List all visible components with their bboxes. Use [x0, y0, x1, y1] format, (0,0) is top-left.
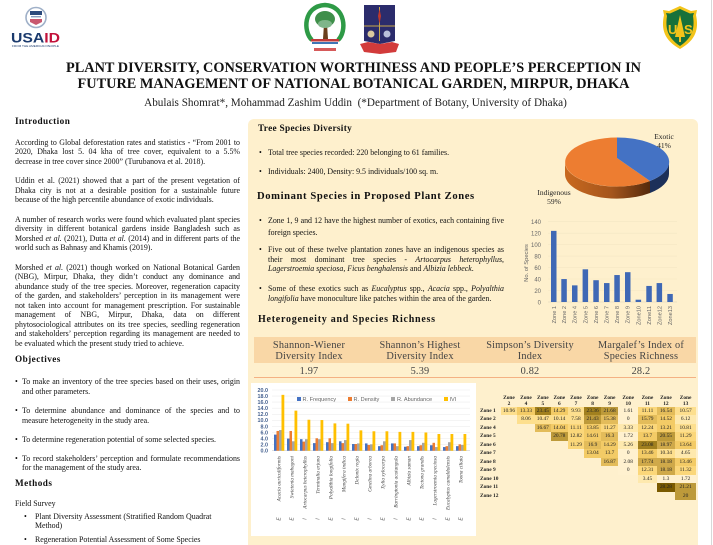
pie label: exotic: 41% — [657, 140, 671, 150]
title: PLANT DIVERSITY, CONSERVATION WORTHINESS AND PEOPLE’S PERCEPTION IN — [66, 60, 641, 76]
table: similarity matrix between zones: 20 — [683, 493, 688, 499]
bullet: indigenous dominants — [259, 245, 504, 273]
bullet: individuals: Individuals: 2400, Density: 9.5 individuals/100 sq. m. — [268, 167, 438, 176]
pie label: indigenous: 59% — [547, 197, 561, 206]
text: introduction paragraph 1: decrease in tree cover since 2000” (Turubanova et al. 2018). — [15, 157, 205, 166]
table: similarity matrix between zones: 13.04 — [587, 450, 599, 456]
pie label: exotic: Exotic — [654, 132, 674, 141]
objective 1 — [15, 377, 240, 396]
table: similarity matrix between zones: 8 — [591, 401, 594, 407]
heading: dominant species: Dominant Species in Proposed Plant Zones — [257, 191, 475, 202]
bar chart: importance value index of top species: Gmelina arborea — [368, 456, 374, 492]
table: similarity matrix between zones: 28.28 — [660, 484, 672, 490]
bar chart: importance value index of top species: E — [406, 517, 412, 521]
bullet: exotics: foreign species. — [268, 228, 318, 236]
bar chart: importance value index of top species: E — [354, 517, 360, 521]
bar chart: species per zone: Zone 2 — [562, 306, 568, 323]
table: similarity matrix between zones: 13.85 — [587, 425, 599, 431]
table: similarity matrix between zones: 16.67 — [537, 425, 549, 431]
logo: forest department — [304, 2, 346, 51]
table: similarity matrix between zones: Zone 10 — [480, 476, 498, 482]
text: introduction paragraph 4: and stakeholders’ perception regarding its management are needed to — [15, 329, 240, 338]
legend — [297, 397, 457, 403]
method 1: Plant Diversity Assessment (Stratified Random Quadrat — [35, 512, 211, 521]
list: objectives: • — [15, 406, 18, 415]
table: similarity matrix between zones: 18.18 — [660, 467, 672, 473]
bullet: indigenous dominants: Lagerstroemia speciosa, Ficus benghalensis and Albizia lebbeck. — [268, 264, 474, 273]
list: dominant species — [259, 216, 504, 303]
table: similarity matrix between zones: Zone — [553, 395, 565, 401]
text: introduction paragraph 4: phytosociological attributes on its tree species, seedling regeneration — [15, 320, 240, 329]
list: dominant species: • — [259, 284, 262, 293]
bar chart: species per zone: 140 — [531, 220, 542, 226]
heading: tree species diversity: Tree Species Diversity — [258, 124, 352, 134]
table: similarity matrix between zones: 12.82 — [570, 433, 582, 439]
table: similarity matrix between zones: Zone — [570, 395, 582, 401]
bar chart: importance value index of top species: Xylia xylocarpa — [380, 456, 386, 490]
table: similarity matrix between zones: Zone 11 — [480, 484, 498, 490]
bullet: monoculture exotics: longifolia have monoculture like patches within the area of the garden. — [268, 294, 491, 303]
bar chart: importance value index of top species: 2.0 — [260, 442, 268, 448]
heading: introduction: Introduction — [15, 116, 70, 126]
bar chart: importance value index of top species: Barringtonia acutangula — [394, 456, 400, 508]
bar chart: importance value index of top species: Delonix regia — [354, 456, 360, 485]
logo: US forest service shield — [662, 6, 697, 49]
bar chart: species per zone: 60 — [534, 266, 542, 272]
bar chart: importance value index of top species: E — [446, 517, 452, 521]
index: Simpson — [486, 340, 574, 377]
method 1 — [24, 512, 212, 530]
bar chart: importance value index of top species: Acacia auriculiformis — [276, 456, 282, 502]
table: similarity matrix between zones: 13.7 — [643, 433, 652, 439]
text: introduction paragraph 4: abundance study of the tree species. Moreover, regeneration capacity — [15, 282, 240, 291]
bar chart: importance value index of top species: 8.0 — [260, 424, 268, 430]
objective 4: To record stakeholders’ perception and formulate recommendations — [22, 454, 240, 462]
pie label: indigenous: Indigenous — [537, 188, 571, 197]
page edge line — [711, 0, 712, 545]
method 1: Method) — [35, 520, 62, 530]
table: similarity matrix between zones: 12.31 — [641, 467, 654, 473]
index: Shannon-Wiener: 1.97 — [300, 366, 318, 377]
list: objectives: • — [15, 435, 18, 444]
bar chart: importance value index of top species: E — [328, 517, 334, 521]
bar chart: importance value index of top species: I — [394, 518, 400, 520]
bullet: monoculture exotics: Some of these exotics such as Eucalyptus spp., Acacia spp., Polyalthia — [268, 284, 504, 293]
authors: Abulais Shomrat*, Mohammad Zashim Uddin (*Department of Botany, University of Dhaka) — [144, 97, 567, 109]
table: similarity matrix between zones: 10.47 — [537, 416, 549, 422]
bar chart: importance value index of top species: 16.0 — [258, 400, 268, 406]
table: similarity matrix between zones: 0 — [627, 467, 630, 473]
logo: university of Dhaka — [360, 5, 399, 54]
table: similarity matrix between zones: Zone — [587, 395, 598, 401]
legend: R. Density — [354, 397, 380, 403]
table: similarity matrix between zones: 11.11 — [642, 408, 653, 414]
bar chart: species per zone: Zone 9 — [626, 306, 632, 323]
text: introduction paragraph 1 — [15, 138, 240, 166]
objective 4: for the management of the study area. — [22, 463, 141, 472]
bar chart: species per zone: Zone 6 — [594, 306, 600, 323]
text: introduction paragraph 4: of the garden, and stakeholders’ perception in its management were — [15, 291, 240, 300]
logo: US forest service shield: U — [668, 22, 677, 37]
table: similarity matrix between zones: 9 — [608, 401, 611, 407]
bar chart: importance value index of top species: Albizia saman — [406, 456, 412, 487]
table: similarity matrix between zones: Zone 7 — [480, 450, 496, 456]
bar chart: importance value index of top species: 6.0 — [260, 430, 268, 436]
heading: objectives: Objectives — [15, 354, 61, 364]
index: Simpson: Simpson’s Diversity — [486, 340, 574, 350]
index: Shannon-Wiener: Diversity Index — [275, 350, 343, 362]
bar chart: species per zone — [524, 220, 677, 325]
bar chart: importance value index of top species: I — [316, 518, 322, 520]
table: similarity matrix between zones: Zone — [642, 395, 653, 401]
text: introduction paragraph 1: According to Global deforestation rates and statistics - “From 2001 to — [15, 138, 240, 146]
table: similarity matrix between zones: 20.78 — [553, 433, 565, 439]
table: similarity matrix between zones: 14.61 — [587, 433, 599, 439]
index: Margalef — [598, 340, 684, 377]
text: introduction paragraph 4: (NBG), Mirpur, Dhaka, they didn’t conduct any dominance and — [15, 272, 240, 281]
table: similarity matrix between zones: 12.24 — [641, 425, 654, 431]
table: similarity matrix between zones: Zone 1 — [480, 408, 496, 414]
table: similarity matrix between zones: 23.08 — [641, 442, 654, 448]
table: similarity matrix between zones: 13.21 — [660, 425, 672, 431]
bar chart: species per zone: 120 — [531, 232, 542, 238]
table: similarity matrix between zones: 0 — [627, 450, 630, 456]
bar chart: species per zone: Zone13 — [668, 306, 674, 325]
text: field survey: Field Survey — [15, 498, 56, 508]
bar chart: importance value index of top species: 20.0 — [258, 388, 268, 394]
text: introduction paragraph 2: Dhaka city is not at a desirable position for a sustainable future — [15, 186, 240, 195]
title: FUTURE MANAGEMENT OF NATIONAL BOTANICAL GARDEN, MIRPUR, DHAKA — [78, 76, 629, 92]
list: dominant species: • — [259, 216, 262, 224]
bar chart: species per zone: 0 — [538, 300, 542, 306]
panel: results background — [248, 119, 698, 545]
bar chart: species per zone: 40 — [534, 277, 542, 283]
table: similarity matrix between zones — [480, 395, 696, 500]
table: similarity matrix between zones: 14.29 — [553, 408, 565, 414]
table: similarity matrix between zones: 14.52 — [660, 416, 672, 422]
table: similarity matrix between zones: 12 — [663, 401, 669, 407]
text: introduction paragraph 2: because of the high percentile abundance of exotic individuals. — [15, 195, 214, 204]
list: objectives — [15, 377, 240, 472]
table: similarity matrix between zones: 11.11 — [570, 425, 582, 431]
text: introduction paragraph 2 — [15, 176, 240, 204]
table: similarity matrix between zones: 16.87 — [604, 459, 616, 465]
text: introduction paragraph 3: A number of research works were found which evaluated plant species — [15, 214, 240, 224]
text: introduction paragraph 4: be evaluated which the present study tried to achieve. — [15, 339, 184, 348]
table: similarity matrix between zones: 0 — [627, 416, 630, 422]
logo: USAID: FROM THE AMERICAN PEOPLE — [12, 44, 59, 48]
bar chart: importance value index of top species: I — [368, 518, 374, 520]
text: introduction paragraph 3: diversity in different botanical gardens inside Bangladesh such as — [15, 224, 240, 233]
bar chart: importance value index of top species: 14.0 — [258, 406, 268, 412]
bar chart: importance value index of top species: Toona ciliata — [458, 456, 464, 483]
table: similarity matrix between zones: 13.7 — [605, 450, 614, 456]
table: similarity matrix between zones: Zone 5 — [480, 433, 496, 439]
table: similarity matrix between zones: 11.29 — [570, 442, 582, 448]
bar chart: importance value index of top species: Mangifera indica — [340, 456, 348, 493]
objective 1: To make an inventory of the tree species based on their uses, origin — [22, 377, 240, 386]
table: similarity matrix between zones: 10.81 — [680, 425, 692, 431]
heading: methods: Methods — [15, 478, 52, 488]
bar chart: importance value index of top species: E — [380, 517, 386, 521]
bar chart: species per zone: Zone 1 — [552, 306, 558, 323]
bullet: exotics — [259, 216, 504, 237]
objective 3: To determine regeneration potential of some selected species. — [22, 435, 216, 444]
table: similarity matrix between zones: 10.34 — [660, 450, 672, 456]
table: similarity matrix between zones: 4.65 — [681, 450, 690, 456]
bar chart: importance value index of top species: 10.0 — [258, 418, 268, 424]
logo: USAID: USA ID — [11, 30, 60, 46]
table: diversity indices — [254, 337, 696, 378]
table: similarity matrix between zones: 1.61 — [624, 408, 633, 414]
index: Simpson: 0.82 — [521, 366, 539, 377]
index: Simpson: Index — [518, 350, 542, 362]
table: similarity matrix between zones: 1.72 — [624, 433, 633, 439]
bar chart: importance value index of top species: Polyalthia longifolia — [328, 456, 334, 500]
legend: R. Frequency — [302, 397, 336, 403]
table: similarity matrix between zones: 3.45 — [643, 476, 652, 482]
bar chart: species per zone: Zone10 — [636, 306, 642, 325]
bar chart: species per zone: No. of Species — [524, 244, 530, 282]
table: similarity matrix between zones: 5 — [541, 401, 544, 407]
bar chart: importance value index of top species: Eucalyptus camaldulensis — [446, 456, 452, 511]
table: similarity matrix between zones: 2 — [508, 401, 510, 407]
table: similarity matrix between zones: 6 — [558, 401, 561, 407]
index: Shannon highest: Diversity Index — [386, 350, 454, 362]
bar chart: importance value index of top species: E — [276, 517, 282, 521]
table: similarity matrix between zones: 20.55 — [660, 433, 672, 439]
objective 2: measure heterogeneity in the study area. — [22, 416, 149, 425]
list: methods: • — [24, 512, 27, 521]
header band — [254, 337, 696, 363]
text: introduction paragraph 3 — [15, 214, 240, 252]
bullet: total species: Total tree species recorded: 220 belonging to 61 families. — [268, 148, 449, 156]
table: similarity matrix between zones: Zone 6 — [480, 442, 496, 448]
objective 4 — [15, 454, 240, 472]
index: Shannon highest — [380, 340, 460, 377]
text: introduction paragraph 4: management of NBG, Mirpur, Dhaka, data on different — [15, 310, 240, 319]
table: similarity matrix between zones: Zone — [680, 395, 691, 401]
list: objectives: • — [15, 454, 18, 462]
bullet: indigenous dominants: their most dominant tree species - Artocarpus heterophyllus, — [268, 255, 504, 264]
table: similarity matrix between zones: 2.08 — [624, 459, 633, 465]
pie label: exotic — [654, 132, 674, 150]
table: similarity matrix between zones: 16.3 — [605, 433, 614, 439]
table: similarity matrix between zones: 18.97 — [660, 442, 672, 448]
table: similarity matrix between zones: 1.72 — [681, 476, 690, 482]
text: introduction paragraph 4: not taken into account for management prescription. For sustainable — [15, 301, 240, 310]
table: similarity matrix between zones: 16.9 — [588, 442, 597, 448]
heading: heterogeneity and species richness: Heterogeneity and Species Richness — [258, 314, 436, 324]
index: Shannon highest: 5.39 — [411, 366, 429, 377]
table: similarity matrix between zones: 15.38 — [604, 416, 616, 422]
value rule — [254, 377, 696, 378]
table: similarity matrix between zones: 14.04 — [553, 425, 565, 431]
bar chart: importance value index of top species: 4.0 — [260, 436, 268, 442]
table: similarity matrix between zones: 13.46 — [641, 450, 654, 456]
bar chart: importance value index of top species: E — [420, 517, 426, 521]
bar chart: importance value index of top species: 0.0 — [260, 449, 268, 455]
table: similarity matrix between zones: 9.93 — [571, 408, 581, 414]
text: introduction paragraph 3: world such as Bahnasy and Khamis (2019). — [15, 243, 152, 252]
table: similarity matrix between zones: Zone — [622, 395, 634, 401]
table: similarity matrix between zones: 10.57 — [680, 408, 692, 414]
bar chart: importance value index of top species: I — [432, 518, 438, 520]
table: similarity matrix between zones: 16.54 — [660, 408, 672, 414]
table: similarity matrix between zones: Zone — [503, 395, 515, 401]
table: similarity matrix between zones: 3.33 — [624, 425, 633, 431]
index: Shannon-Wiener — [273, 340, 345, 377]
bar chart: importance value index of top species — [251, 383, 476, 536]
bar chart: importance value index of top species: 12.0 — [258, 412, 268, 418]
table: similarity matrix between zones: 4 — [525, 401, 527, 407]
table: similarity matrix between zones: Zone 2 — [480, 416, 496, 422]
list: dominant species: • — [259, 245, 262, 254]
logo: USAID — [11, 6, 60, 48]
bar chart: importance value index of top species: E — [290, 517, 296, 521]
table: similarity matrix between zones: 18.18 — [660, 459, 672, 465]
bullet: exotics: Zone 1, 9 and 12 have the highest number of exotics, each containing five — [268, 216, 504, 224]
table: similarity matrix between zones: Zone 8 — [480, 459, 496, 465]
table: similarity matrix between zones: 1.3 — [663, 476, 669, 482]
table: similarity matrix between zones: 10.96 — [503, 408, 515, 414]
table: similarity matrix between zones: 13.33 — [520, 408, 532, 414]
legend: R. Abundance — [397, 397, 432, 403]
table: similarity matrix between zones: 23.36 — [587, 408, 599, 414]
table: similarity matrix between zones: Zone 12 — [480, 493, 498, 499]
logo: US forest service shield: S — [684, 22, 693, 37]
bar chart: species per zone: Zone 8 — [615, 306, 621, 323]
bar chart: importance value index of top species: Lagerstroemia speciosa — [432, 456, 438, 507]
table: similarity matrix between zones: 13 — [683, 401, 688, 407]
text: introduction paragraph 4: Morshed et al. (2021) though worked on National Botanical Garden — [15, 262, 240, 272]
list: methods: • — [24, 535, 27, 544]
table: similarity matrix between zones: 15.79 — [641, 416, 654, 422]
index: Shannon highest: Shannon’s Highest — [380, 340, 460, 350]
table: similarity matrix between zones: 17.74 — [641, 459, 654, 465]
index: Margalef: Margalef’s Index of — [598, 340, 684, 350]
bar chart: species per zone: Zone 7 — [605, 306, 611, 323]
table: similarity matrix between zones: 6.12 — [681, 416, 690, 422]
table: similarity matrix between zones: 11.27 — [604, 425, 616, 431]
method 2: Regeneration Potential Assessment of Some Species — [35, 535, 200, 544]
bar chart: species per zone: Zone12 — [657, 306, 663, 325]
bar chart: importance value index of top species: Swietenia mahagoni — [290, 455, 296, 498]
bar chart: importance value index of top species: I — [302, 518, 308, 520]
table: similarity matrix between zones: 11 — [645, 401, 650, 407]
bar chart: importance value index of top species: Terminalia arjuna — [316, 456, 322, 494]
table: similarity matrix between zones: Zone 9 — [480, 467, 496, 473]
table: similarity matrix between zones: 11.32 — [680, 467, 692, 473]
table: similarity matrix between zones: 13.64 — [680, 442, 692, 448]
bar chart: importance value index of top species: 18.0 — [258, 394, 268, 400]
table: similarity matrix between zones: 7 — [575, 401, 577, 407]
legend: IVI — [450, 397, 457, 403]
text: introduction paragraph 1: 2020, Dhaka lost 5. 04 kha of tree cover, equivalent to a 5.5% — [15, 147, 240, 156]
table: similarity matrix between zones: 14.29 — [604, 442, 616, 448]
table: similarity matrix between zones: 7.58 — [571, 416, 581, 422]
index: Margalef: 28.2 — [632, 366, 650, 377]
table: similarity matrix between zones: 21.21 — [680, 484, 692, 490]
bar chart: species per zone: 100 — [531, 243, 542, 249]
table: similarity matrix between zones: 10 — [626, 401, 631, 407]
list: tree species diversity — [259, 148, 449, 176]
text: introduction paragraph 3: Morshed et al. (2021), Dutta et al. (2014) and in different parts of the — [15, 234, 240, 243]
table: similarity matrix between zones: 23.45 — [537, 408, 549, 414]
bar chart: species per zone: Zone 5 — [583, 306, 589, 323]
bullet: monoculture exotics — [259, 284, 504, 303]
bar chart: importance value index of top species: I — [342, 518, 348, 520]
objective 2 — [15, 406, 240, 425]
bar chart: species per zone: Zone 4 — [573, 306, 579, 323]
pie label: indigenous — [537, 188, 571, 206]
text: introduction paragraph 4 — [15, 262, 240, 348]
list: tree species diversity: • — [259, 167, 262, 176]
table: similarity matrix between zones: 5.26 — [624, 442, 633, 448]
table: similarity matrix between zones: Zone — [520, 395, 532, 401]
table: similarity matrix between zones: 11.29 — [680, 433, 692, 439]
bullet: indigenous dominants: Five out of these twelve plantation zones have an indigenous species as — [268, 245, 504, 254]
bar chart: importance value index of top species: Tectona grandis — [420, 456, 426, 489]
objective 2: To determine abundance and dominance of the species and to — [22, 406, 240, 415]
bar chart: species per zone: Zone11 — [647, 306, 653, 325]
pie chart: exotic vs indigenous — [565, 138, 670, 199]
objective 1: and other parameters. — [22, 387, 90, 396]
table: similarity matrix between zones: 21.68 — [604, 408, 616, 414]
text: introduction paragraph 2: Uddin et al. (2021) showed that a part of the present vegetation of — [15, 176, 240, 185]
list: methods — [24, 512, 212, 544]
table: similarity matrix between zones: Zone 4 — [480, 425, 496, 431]
bar chart: species per zone: 20 — [534, 289, 542, 295]
bar chart: importance value index of top species: Artocarpus heterophyllus — [302, 456, 308, 510]
list: tree species diversity: • — [259, 148, 262, 156]
index: Shannon-Wiener: Shannon-Wiener — [273, 340, 345, 350]
title — [66, 60, 641, 92]
table: similarity matrix between zones: 13.46 — [680, 459, 692, 465]
list: objectives: • — [15, 377, 18, 386]
table: similarity matrix between zones: Zone — [660, 395, 672, 401]
table: similarity matrix between zones: 8.06 — [521, 416, 531, 422]
bar chart: species per zone: 80 — [534, 254, 542, 260]
index: Margalef: Species Richness — [604, 350, 678, 362]
table: similarity matrix between zones: Zone — [537, 395, 549, 401]
table: similarity matrix between zones: 10.14 — [553, 416, 565, 422]
table: similarity matrix between zones: 21.43 — [587, 416, 599, 422]
bar chart: importance value index of top species: E — [458, 517, 464, 521]
table: similarity matrix between zones: Zone — [604, 395, 615, 401]
